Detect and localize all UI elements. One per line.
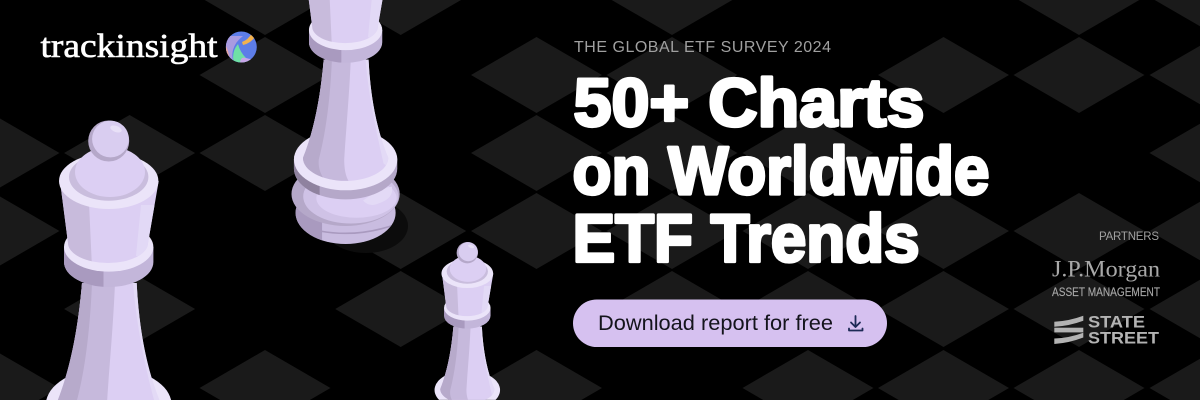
partner: State Street: STREET [1088,329,1159,347]
partner: J.P. Morgan: ASSET MANAGEMENT [1052,285,1161,299]
shadow under top chess piece [324,199,408,253]
headline: on Worldwide [572,133,990,209]
headline: ETF Trends [573,200,920,276]
partners label: PARTNERS [1099,231,1159,243]
icon: download arrow [849,316,862,330]
chess piece: top centre [289,0,404,244]
partner: J.P. Morgan [1052,256,1161,299]
partner: J.P. Morgan: J.P.Morgan [1052,256,1161,282]
logo globe [226,32,257,62]
partners [1052,231,1161,347]
button: download report: Download report for free [598,312,833,335]
chess piece: small bottom [435,242,500,400]
headline [572,65,990,276]
eyebrow: survey title: THE GLOBAL ETF SURVEY 2024 [574,39,831,56]
chess piece: large left [46,120,171,400]
partner: State Street: STATE [1088,313,1145,331]
partner: State Street [1054,313,1159,347]
logo wordmark: trackinsight [40,28,218,65]
headline: 50+ Charts [574,65,924,141]
logo: trackinsight [40,32,257,64]
button: download report [573,300,887,347]
